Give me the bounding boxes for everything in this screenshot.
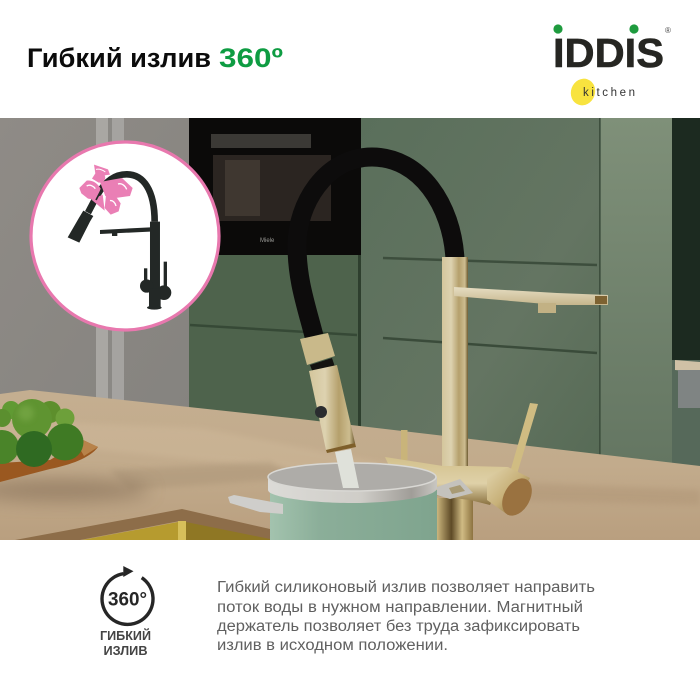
faucet body: [442, 257, 468, 467]
icon: black faucet: [68, 174, 171, 310]
handle cylinder: [487, 467, 530, 515]
badge caption: ГИБКИЙ: [100, 628, 151, 643]
back small lever: [401, 430, 408, 460]
icon: 360 degree badge: [102, 566, 153, 624]
description text: Гибкий силиконовый излив позволяет направить: [217, 579, 595, 596]
water stream: [335, 449, 359, 488]
icon: 360 degree badge: 360°: [108, 588, 147, 610]
description text: [217, 579, 595, 654]
pot: [228, 463, 473, 545]
title: Гибкий излив: [27, 43, 211, 73]
wooden worktop: [0, 390, 700, 540]
description text: поток воды в нужном направлении. Магнитный: [217, 599, 583, 616]
handle end cap: [502, 478, 532, 516]
base body: [385, 457, 508, 505]
side spout: [454, 287, 608, 305]
aerator: [538, 303, 556, 313]
logo: IDDIS kitchen: kitchen: [583, 87, 635, 99]
green cabinets: [189, 118, 700, 478]
oven: [189, 118, 361, 256]
icon: pink rotation arrows: [79, 165, 133, 215]
fruit bowl with limes: [0, 399, 98, 482]
logo: IDDIS kitchen: ®: [665, 26, 671, 35]
right lever: [510, 403, 538, 474]
description text: держатель позволяет без труда зафиксировать: [217, 618, 580, 635]
photo: kitchen scene: [0, 118, 700, 545]
logo: IDDIS kitchen: IDDIS: [553, 30, 664, 76]
flexible black hose: [297, 157, 455, 336]
lower stem: [437, 498, 473, 540]
description text: излив в исходном положении.: [217, 637, 448, 654]
logo: IDDIS kitchen: [553, 24, 671, 109]
title: 360º: [219, 43, 283, 73]
button: [315, 406, 327, 418]
faucet: [297, 157, 608, 540]
collar: [300, 333, 335, 365]
badge caption: ИЗЛИВ: [104, 643, 148, 658]
callout circle: rotating spout icon: [31, 142, 219, 330]
back wall: [0, 118, 192, 418]
badge caption: [100, 628, 151, 658]
oven: Miele: [260, 238, 275, 244]
spray head: [309, 365, 355, 450]
